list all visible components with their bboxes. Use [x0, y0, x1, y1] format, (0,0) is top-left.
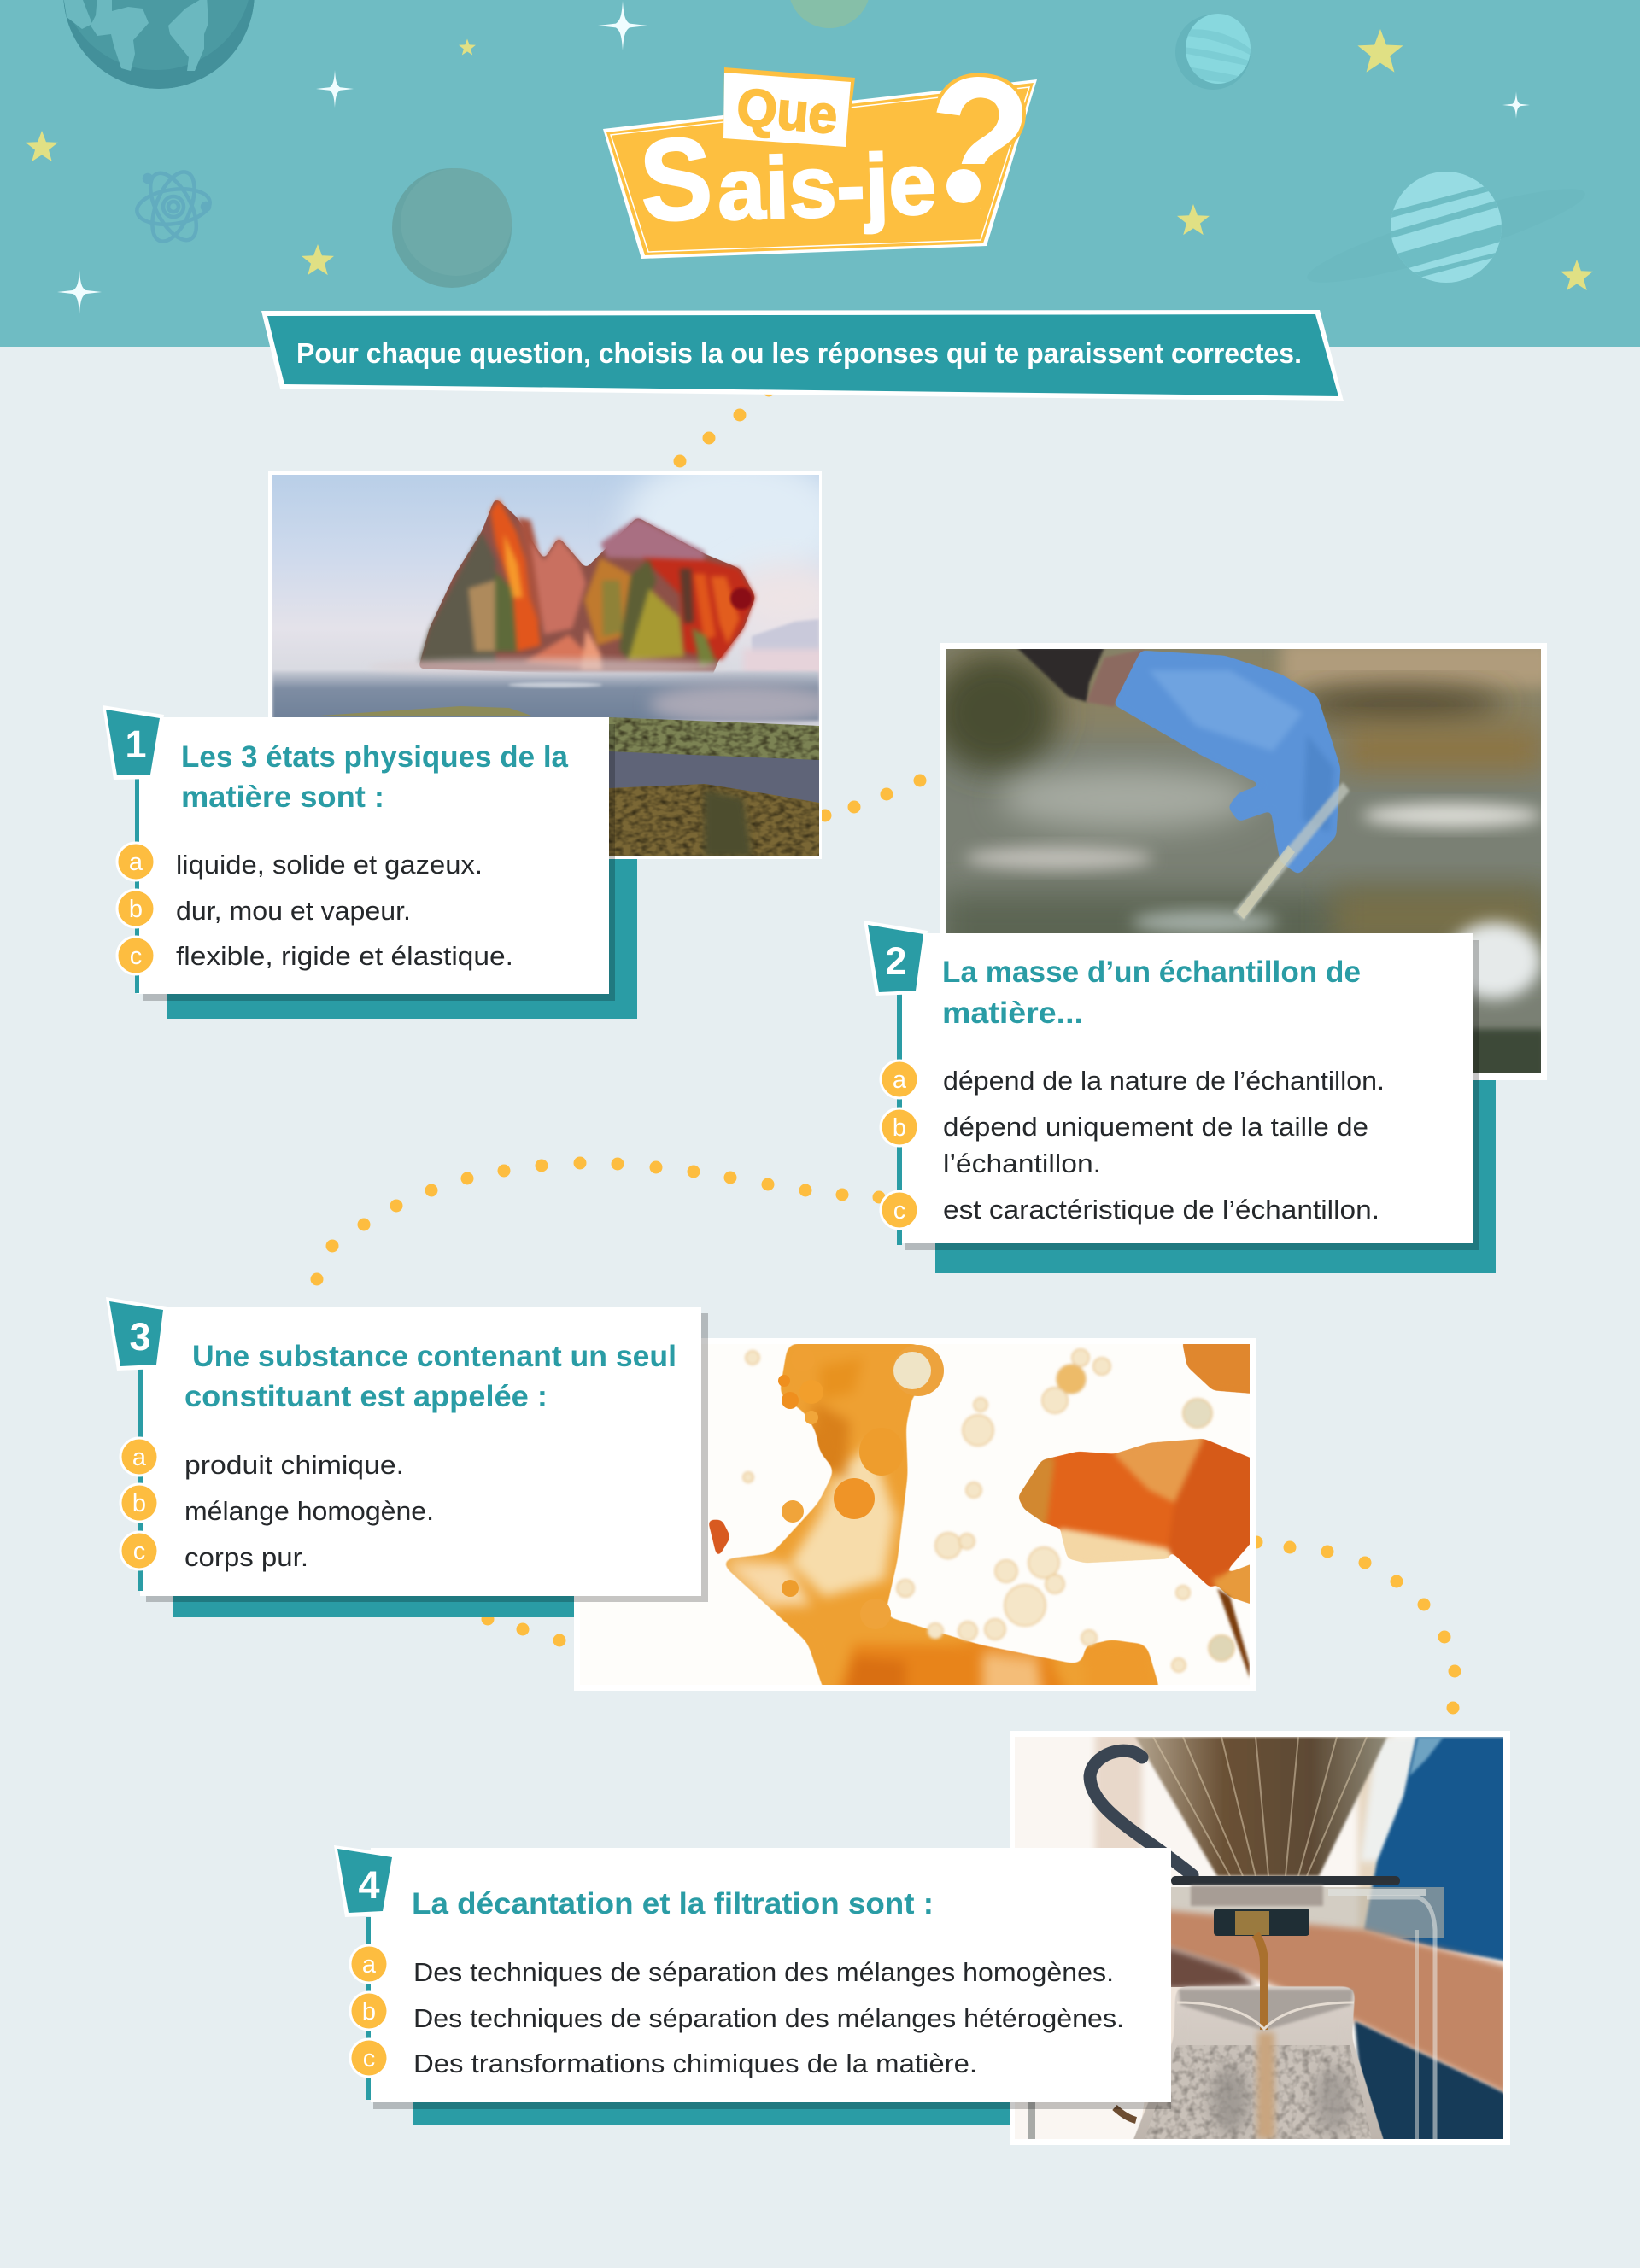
number line — [135, 773, 139, 993]
answers: a — [362, 1951, 377, 1979]
bubbles — [743, 1349, 1234, 1672]
heading: La décantation et la filtration sont : — [412, 1887, 934, 1920]
icon: dark planet — [392, 168, 512, 288]
number badge — [102, 705, 164, 780]
panel 4: teal backing — [413, 2092, 1020, 2125]
number line — [138, 1369, 143, 1591]
photo 3: oil in liquid — [574, 1338, 1256, 1695]
Sais-je wordmark: ais-je — [716, 135, 938, 238]
icon: globe — [61, 0, 255, 89]
Que box — [723, 67, 855, 148]
panel 3: question card — [106, 1297, 708, 1602]
heading — [181, 740, 569, 814]
question mark: ? — [917, 35, 1039, 253]
number badge: 3 — [129, 1315, 151, 1359]
answers: produit chimique. — [184, 1450, 404, 1480]
answers: c — [893, 1197, 905, 1225]
answers: c — [130, 943, 142, 970]
dotted connector paths — [311, 384, 1461, 1715]
number badge — [106, 1297, 167, 1371]
panel 1: teal backing — [167, 854, 637, 1019]
hand and tube — [1016, 647, 1350, 921]
icon: saturn planet — [1391, 172, 1502, 283]
funnel — [1135, 1737, 1387, 1876]
panel 2: question card — [864, 921, 1479, 1250]
photo 1: geyser — [268, 453, 846, 859]
answers: Des techniques de séparation des mélanges homogènes. — [413, 1957, 1114, 1987]
answers: Des transformations chimiques de la matière. — [413, 2049, 977, 2078]
handle — [1090, 1751, 1192, 1875]
answers: Des techniques de séparation des mélanges hétérogènes. — [413, 2003, 1124, 2033]
geyser colour streaks — [419, 499, 755, 670]
answers: b — [893, 1114, 906, 1142]
distant mountain — [751, 618, 819, 651]
heading: constituant est appelée : — [184, 1380, 548, 1413]
answers — [881, 1061, 1385, 1229]
instruction banner — [261, 310, 1344, 401]
answers: a — [893, 1067, 907, 1094]
photo 4: coffee filter — [1010, 1731, 1510, 2156]
orange blob — [708, 1341, 1256, 1605]
answers — [120, 1438, 434, 1572]
heading: matière... — [942, 997, 1083, 1030]
answers: dépend de la nature de l’échantillon. — [943, 1066, 1385, 1096]
answers: c — [133, 1538, 145, 1565]
heading: matière sont : — [181, 780, 384, 814]
answers: l’échantillon. — [943, 1149, 1101, 1178]
icons: yellow stars — [26, 29, 1593, 290]
answers — [117, 843, 513, 974]
answers: mélange homogène. — [184, 1496, 434, 1526]
geyser silhouette — [419, 498, 755, 677]
icon: green planet — [788, 0, 870, 28]
answers: est caractéristique de l’échantillon. — [943, 1195, 1379, 1225]
icons: white sparkles — [57, 1, 1530, 314]
heading: Une substance contenant un seul — [192, 1340, 676, 1373]
number badge — [864, 921, 928, 996]
lower dark — [1355, 2021, 1508, 2143]
answers: c — [363, 2045, 375, 2072]
Que box: Que — [735, 78, 840, 145]
terraces — [609, 717, 819, 762]
panel 2: teal backing — [935, 1076, 1496, 1273]
splash — [718, 1344, 1161, 1695]
answers: b — [132, 1490, 146, 1517]
heading: Les 3 états physiques de la — [181, 740, 569, 774]
answers: b — [362, 1998, 376, 2025]
panel 4: question card — [334, 1845, 1171, 2109]
Sais-je wordmark: S — [637, 113, 715, 246]
answers: dur, mou et vapeur. — [176, 896, 411, 926]
number badge: 2 — [885, 939, 907, 983]
blue shirt — [1364, 1737, 1508, 1961]
heading: La masse d’un échantillon de — [942, 956, 1361, 989]
answers: a — [132, 1444, 147, 1471]
answers: corps pur. — [184, 1542, 308, 1572]
answers: flexible, rigide et élastique. — [176, 941, 513, 971]
header band — [0, 0, 1640, 347]
number line — [897, 991, 902, 1245]
answers — [350, 1945, 1124, 2078]
heading — [184, 1340, 676, 1413]
answers: liquide, solide et gazeux. — [176, 850, 483, 880]
carafe — [1128, 1987, 1388, 2156]
number badge: 1 — [125, 722, 147, 766]
coffee stream — [1256, 1934, 1264, 2030]
answers: dépend uniquement de la taille de — [943, 1112, 1368, 1142]
instruction banner: Pour chaque question, choisis la ou les réponses qui te paraissent correctes. — [296, 337, 1302, 369]
arm — [1170, 1887, 1444, 1938]
icon: striped planet — [1175, 14, 1250, 90]
panel 3: teal backing — [173, 1588, 583, 1617]
glass jar edge — [1367, 1897, 1435, 2139]
Sais-je wordmark — [637, 113, 938, 246]
panel 1: question card — [102, 705, 615, 1001]
left posts under card — [1028, 2101, 1035, 2139]
answers: a — [129, 849, 144, 876]
number badge — [334, 1845, 395, 1917]
answers: b — [129, 896, 143, 923]
icon: atom — [135, 167, 212, 247]
number line — [366, 1917, 371, 2100]
mist and lake — [272, 671, 819, 721]
number badge: 4 — [358, 1863, 380, 1907]
heading — [942, 956, 1361, 1030]
title logo — [603, 35, 1039, 259]
photo 2: glove and water sample — [931, 640, 1555, 1080]
disc and spout — [1171, 1876, 1400, 1885]
